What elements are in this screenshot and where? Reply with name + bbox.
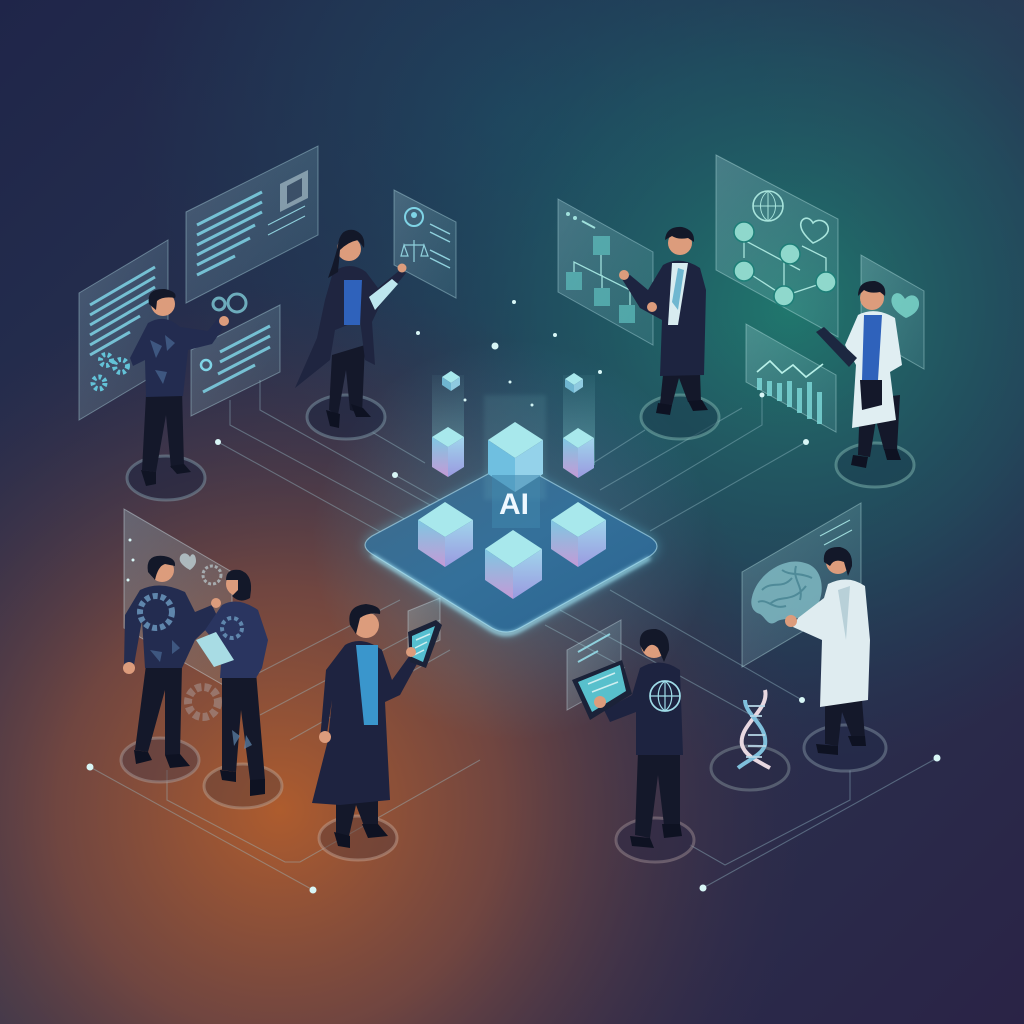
panel: small tablet hologram [567,620,621,710]
glowing node dots [86,300,940,894]
icon: DNA helix on plate [711,690,789,790]
cube: front [485,530,542,599]
AI label on glass [492,475,540,528]
person: doctor with clipboard [816,281,914,487]
person: bearded man [196,570,282,808]
person: man with globe jacket and tablet [572,629,694,862]
AI label on glass: AI [499,488,529,521]
panel: brain scan [742,503,861,667]
person: man with gear sweater left [121,556,221,782]
platform glow [365,467,657,634]
panel: bar and line chart [746,324,836,432]
panel: woman's profile card [394,190,456,298]
person: man in long coat with tablet [312,604,442,860]
panel: left document with gears [79,240,168,420]
panel: upper left document [186,146,318,303]
back glass column [484,395,546,500]
icons: gears near hand [213,294,246,312]
panel: flowchart [558,199,653,345]
panel: tablet hologram behind standing man [408,598,440,655]
panel: lower left list [191,305,280,416]
platform bright front edge [372,555,650,634]
person: man in long coat pointing [619,227,719,439]
left glass pillar [432,371,464,477]
circuit connector lines [90,380,937,890]
cube: back [488,422,543,492]
person: woman with long coat and tablet [295,230,406,439]
icon: large gear on floor [188,687,218,717]
person: man with sweater top left [127,289,229,500]
right glass pillar [563,373,595,478]
cube: right [551,502,606,567]
panel: holographic gears [124,509,232,690]
cube: left [418,502,473,567]
panel: health network [716,155,838,337]
person: doctor examining brain scan [785,547,886,771]
platform slab [365,463,657,632]
panel: heart card [861,255,924,369]
central AI platform [365,371,657,634]
